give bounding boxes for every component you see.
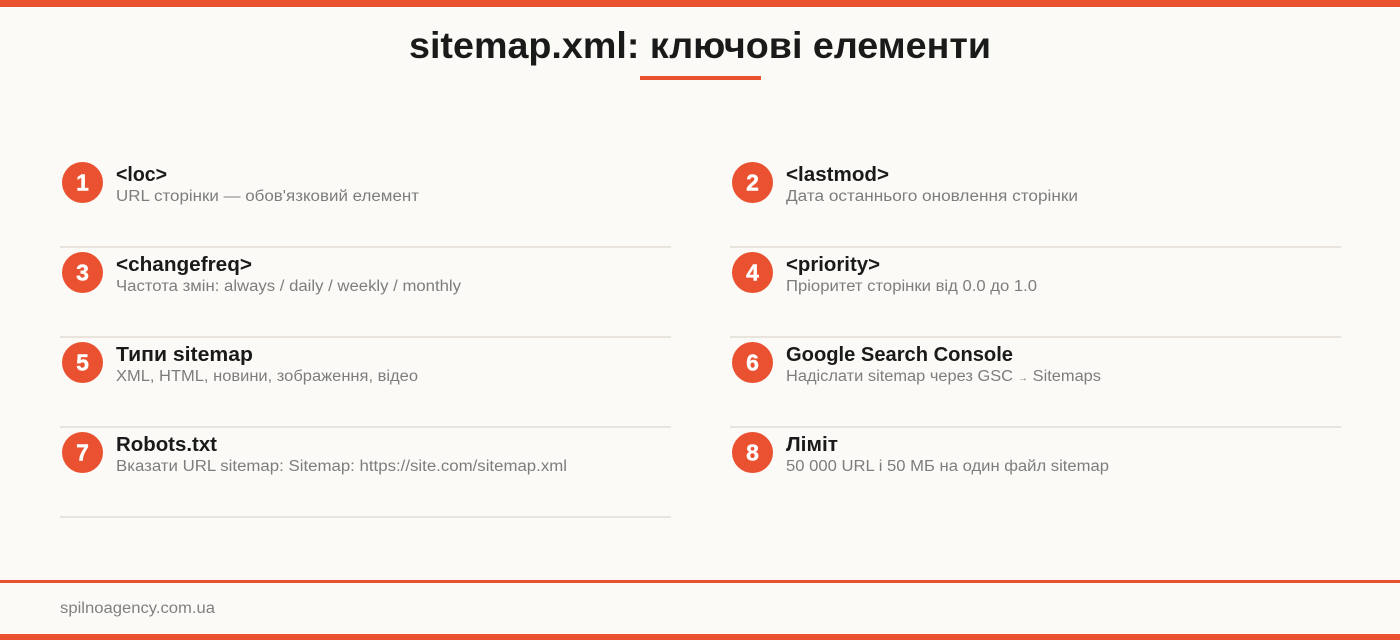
item 5: sitemap types (62, 342, 418, 385)
footer text: spilnoagency.com.ua (60, 600, 215, 617)
item 6: Google Search Console: 6 (746, 350, 759, 376)
item 8: limit: 50 000 URL і 50 МБ на один файл sitemap (786, 458, 1109, 475)
item 4: priority (732, 252, 1037, 295)
item 8: limit (732, 432, 1109, 475)
item 2: lastmod: 2 (746, 170, 759, 196)
item 7: Robots.txt: Robots.txt (116, 434, 217, 456)
item 6: Google Search Console: Надіслати sitemap через GSC → Sitemaps (786, 368, 1101, 385)
title: sitemap.xml: ключові елементи (409, 25, 991, 66)
item 5: sitemap types: Типи sitemap (116, 344, 253, 366)
item 1: loc (62, 162, 419, 205)
item 8: limit: Ліміт (786, 434, 838, 456)
title underline (640, 76, 761, 80)
item 3: changefreq (62, 252, 461, 295)
item 6: Google Search Console (732, 342, 1101, 385)
item 5: sitemap types: 5 (76, 350, 89, 376)
item 6: Google Search Console: Google Search Console (786, 344, 1013, 366)
footer rule (0, 580, 1400, 583)
item 1: loc: <loc> (116, 164, 167, 186)
item 2: lastmod: Дата останнього оновлення сторінки (786, 188, 1078, 205)
item 7: Robots.txt (62, 432, 567, 475)
item 7: Robots.txt: Вказати URL sitemap: Sitemap: https://site.com/sitemap.xml (116, 458, 567, 475)
item 3: changefreq: 3 (76, 260, 89, 286)
item 8: limit: 8 (746, 440, 759, 466)
item 1: loc: URL сторінки — обов'язковий елемент (116, 188, 419, 205)
top accent bar (0, 0, 1400, 7)
item 2: lastmod (732, 162, 1078, 205)
item 3: changefreq: Частота змін: always / daily / weekly / monthly (116, 278, 461, 295)
item 4: priority: Пріоритет сторінки від 0.0 до 1.0 (786, 278, 1037, 295)
bottom accent bar (0, 634, 1400, 640)
item 5: sitemap types: XML, HTML, новини, зображення, відео (116, 368, 418, 385)
item 4: priority: <priority> (786, 254, 880, 276)
item 1: loc: 1 (76, 170, 89, 196)
item 4: priority: 4 (746, 260, 759, 286)
item 3: changefreq: <changefreq> (116, 254, 252, 276)
item 7: Robots.txt: 7 (76, 440, 89, 466)
item 2: lastmod: <lastmod> (786, 164, 889, 186)
